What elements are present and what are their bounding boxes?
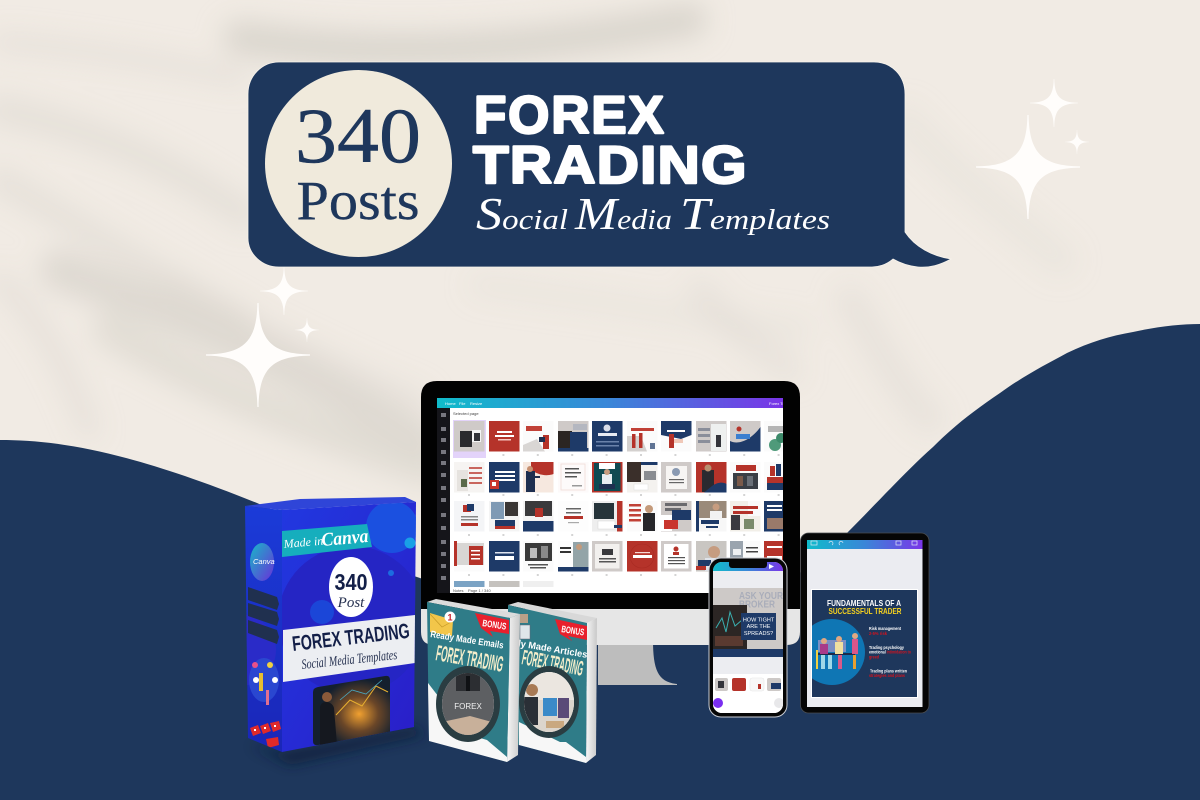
slide bullet list: emotional intimidation to (869, 650, 911, 654)
slide bullet list: Trading plans written (870, 668, 907, 674)
book photo (519, 666, 579, 738)
book cover (508, 605, 587, 763)
bonus ribbon (555, 619, 587, 641)
book title: Ready Made Articles (498, 635, 588, 661)
notes status bar (453, 587, 554, 593)
text: FOREX TRADING (520, 646, 585, 681)
slide bullet list: Trading psychology (869, 645, 904, 650)
heading: FOREX TRADING: TRADING (473, 135, 748, 194)
template thumbnails grid (453, 420, 794, 593)
notes status bar: Page 1 / 340 (468, 588, 491, 593)
monitor chin (421, 609, 800, 645)
bonus ribbon: BONUS (561, 624, 585, 639)
box top edge (245, 497, 416, 510)
smartphone (709, 558, 787, 717)
slide heading: SUCCESSFUL TRADER (828, 607, 902, 616)
phone body (709, 558, 787, 717)
box side panel (245, 506, 282, 752)
subheading: Social Media Templates: Templates (680, 188, 830, 239)
app top bar: Forex Trading (769, 401, 794, 406)
box front panel: Made in (282, 534, 324, 551)
monitor body (421, 381, 800, 645)
sparkles: left (206, 267, 319, 407)
side tags (248, 587, 279, 610)
book photo (436, 666, 500, 742)
phone design: how tight are the spreads: HOW TIGHT (743, 618, 775, 624)
social icon cluster (249, 658, 279, 705)
phone page strip (713, 674, 783, 713)
box front panel: Post (337, 595, 365, 611)
tablet slide: fundamentals of a successful trader (811, 589, 918, 698)
notes status bar: Notes (453, 588, 463, 593)
box front panel: 340 (334, 569, 368, 595)
screen (437, 398, 794, 593)
heading: FOREX TRADING (473, 86, 748, 194)
slide bullet list: 2-5% risk (869, 631, 887, 636)
badge circle: 340 Posts (265, 70, 452, 257)
badge circle: 340 Posts: 340 (295, 92, 421, 179)
phone screen (713, 560, 784, 713)
app sidebar (437, 408, 450, 593)
book top edge (508, 602, 597, 623)
bonus book: Ready Made Articles (508, 602, 597, 763)
social tiles (250, 721, 281, 748)
bonus ribbon (475, 613, 509, 637)
phone design: how tight are the spreads (713, 588, 783, 657)
app top bar: File (459, 401, 466, 406)
book pages (586, 618, 597, 763)
monitor stand (598, 640, 677, 685)
subheading: Social Media Templates: Media (574, 188, 672, 239)
navy wave (0, 324, 1200, 800)
trader photo (313, 676, 390, 745)
sparkles: top right (976, 79, 1089, 219)
bonus book: Ready Made Emails (427, 599, 520, 762)
box side panel: Canva (253, 557, 275, 566)
badge circle: 340 Posts: Posts (296, 170, 420, 231)
phone notch (729, 562, 767, 568)
tablet app bar (807, 540, 922, 549)
340 Post badge (329, 557, 373, 617)
book pages (507, 614, 520, 762)
app top bar (437, 398, 794, 408)
bonus ribbon: BONUS (482, 618, 507, 633)
slide bullet list: greed (869, 654, 879, 660)
phone design: how tight are the spreads: BROKER (739, 598, 775, 610)
slide bullet list (869, 626, 911, 678)
box shadow (250, 727, 425, 765)
slide heading: FUNDAMENTALS OF A (827, 599, 901, 608)
text: FOREX TRADING (434, 640, 505, 677)
title band (283, 615, 415, 682)
book title: Ready Made Emails (430, 629, 504, 652)
canva logo circle (250, 543, 274, 581)
product box: Made in Canva (204, 497, 426, 765)
selection toolbar: Selected page (453, 411, 479, 416)
box front panel: Canva (321, 526, 370, 551)
phone design: how tight are the spreads: SPREADS? (744, 631, 773, 637)
checklist icon (520, 614, 530, 639)
envelope icon (430, 612, 456, 636)
box front panel (278, 501, 426, 752)
book photo: FOREX (454, 702, 482, 711)
slide illustration (812, 619, 865, 685)
slide heading (827, 599, 902, 616)
bubble shape (248, 62, 951, 267)
phone pages button (774, 698, 784, 708)
app top bar: Resize (470, 401, 483, 406)
book cover (427, 602, 510, 762)
envelope icon: 1 (447, 612, 453, 622)
phone app bar (713, 562, 783, 571)
app top bar: Home (445, 401, 456, 406)
subheading: Social Media Templates: Social (476, 188, 568, 239)
phone add button (713, 698, 723, 708)
made in canva banner (282, 524, 372, 557)
desktop monitor (421, 381, 800, 685)
box front panel: FOREX TRADING (291, 620, 411, 656)
subheading: Social Media Templates (476, 188, 830, 239)
tablet screen (807, 540, 922, 707)
tablet (799, 533, 929, 713)
tablet body (800, 533, 929, 713)
book top edge (427, 599, 520, 618)
box front panel: Social Media Templates (301, 648, 398, 673)
title speech bubble (248, 62, 951, 267)
slide bullet list: strategies and plans (869, 673, 905, 678)
slide bullet list: Risk management (869, 626, 901, 631)
heading: FOREX TRADING: FOREX (474, 86, 666, 145)
phone design: how tight are the spreads: ARE THE (747, 624, 771, 630)
phone design: how tight are the spreads: ASK YOUR (739, 590, 783, 602)
